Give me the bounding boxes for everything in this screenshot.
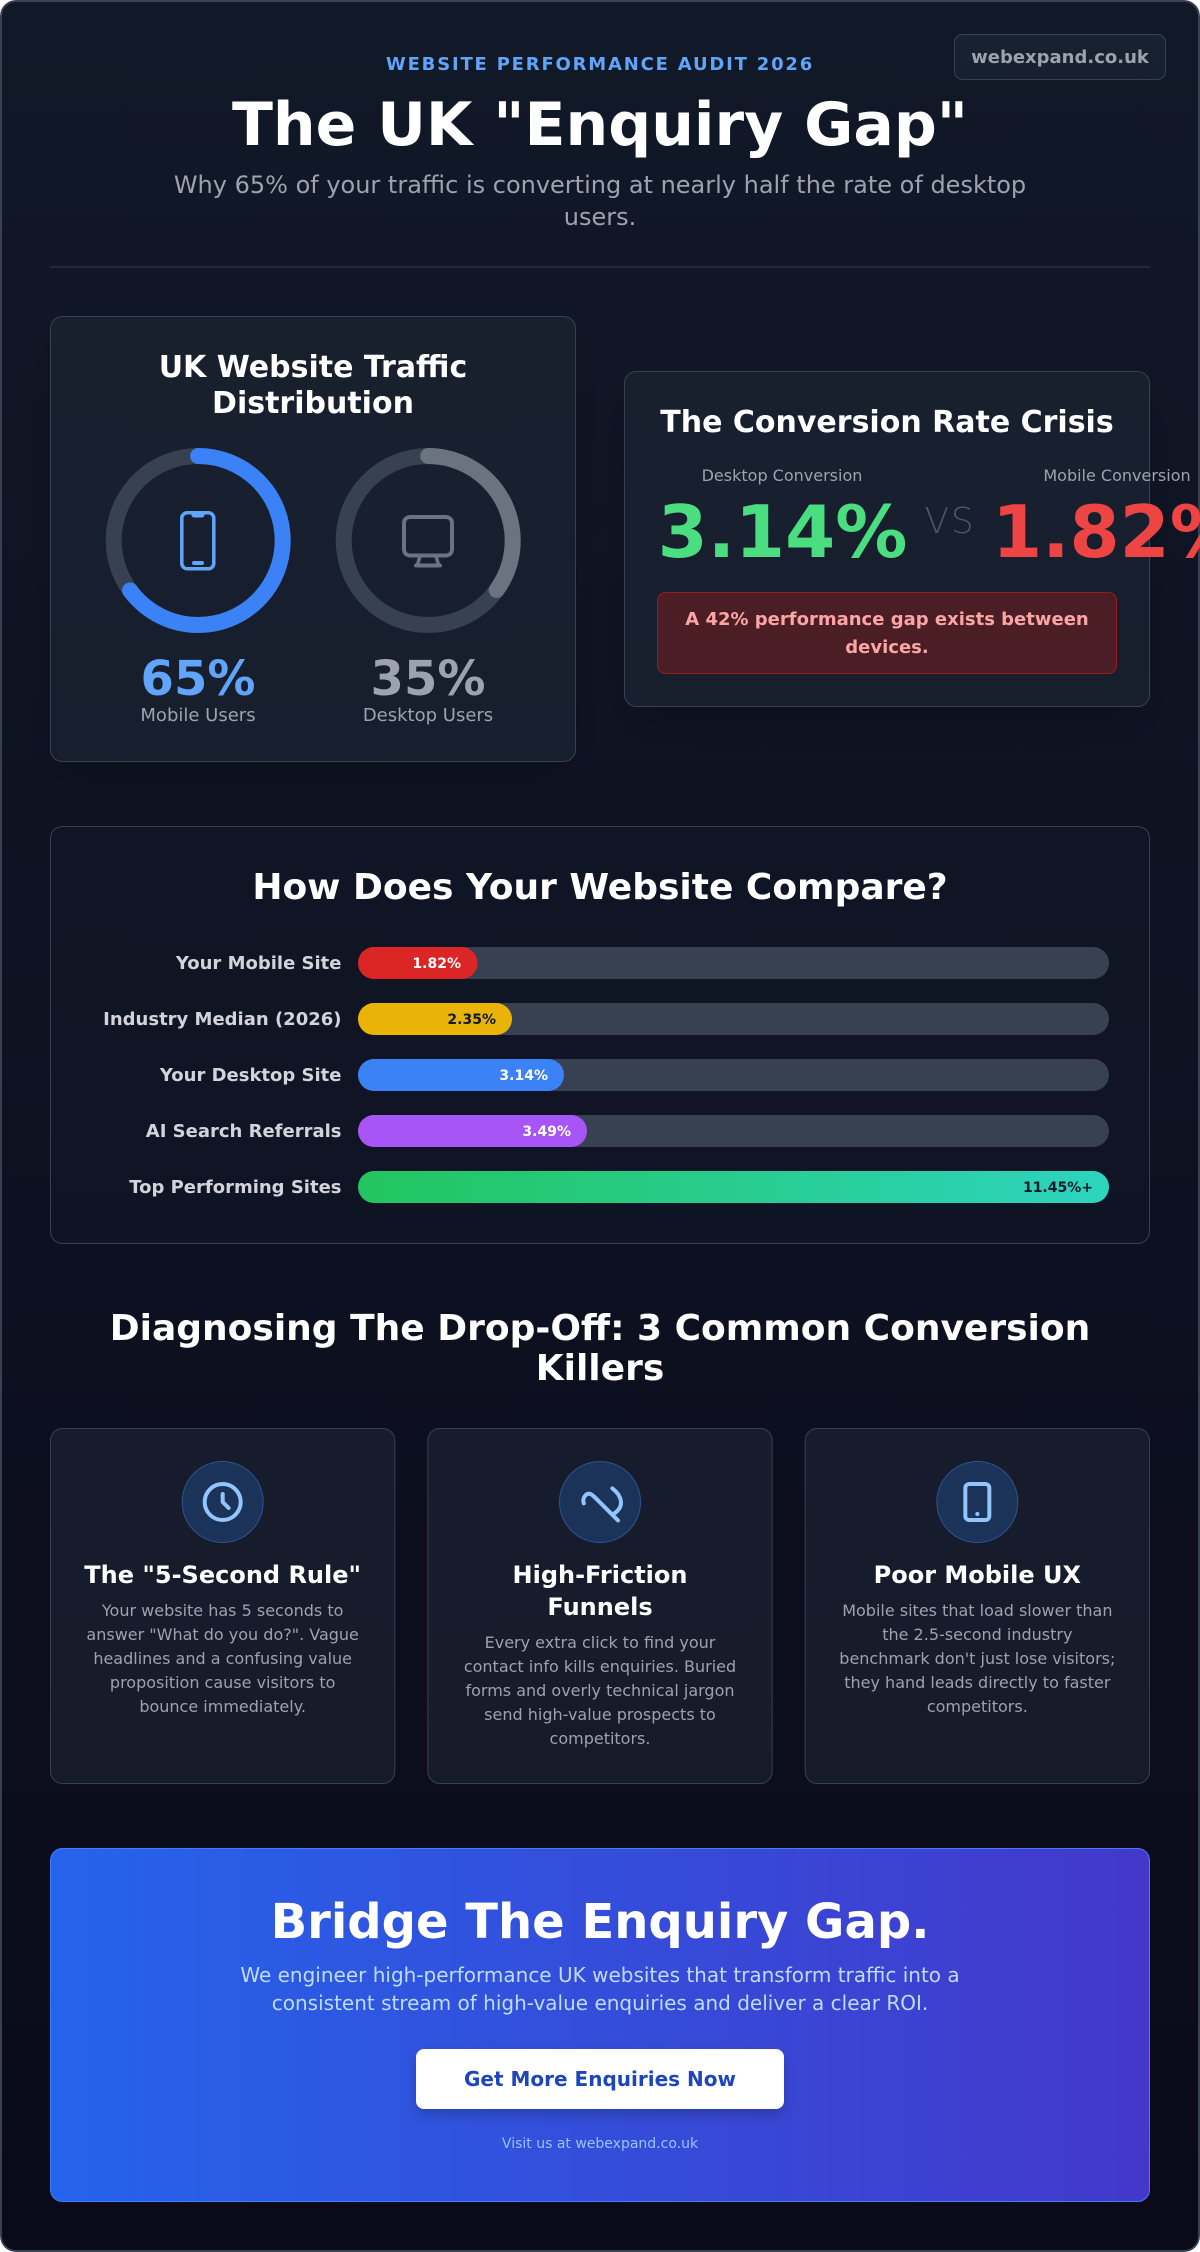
card text: benchmark don't just lose visitors; xyxy=(839,1649,1115,1668)
bar: industry median: 2.35% xyxy=(447,1012,496,1028)
desktop conversion stat: Desktop Conversion xyxy=(702,466,862,485)
eyebrow label: WEBSITE PERFORMANCE AUDIT 2026 xyxy=(386,54,814,75)
panel: website comparison bar chart xyxy=(50,826,1150,1244)
desktop percentage: 35% xyxy=(371,651,485,707)
desktop conversion stat xyxy=(662,469,906,558)
website badge: webexpand.co.uk xyxy=(971,47,1150,68)
bar: top performing sites: 11.45%+ xyxy=(1023,1180,1093,1196)
card: 5-second rule: The "5-Second Rule" xyxy=(84,1561,361,1589)
bar: top performing sites xyxy=(129,1171,1109,1203)
conversion heading: The Conversion Rate Crisis xyxy=(660,405,1114,440)
comparison heading: How Does Your Website Compare? xyxy=(252,867,948,908)
panel: conversion rate crisis xyxy=(624,372,1200,706)
cta text: consistent stream of high-value enquiries and deliver a clear ROI. xyxy=(272,1991,928,2015)
card text: the 2.5-second industry xyxy=(882,1625,1072,1644)
callout: performance gap: A 42% performance gap exists between xyxy=(685,609,1089,630)
website badge xyxy=(954,34,1166,80)
card text: answer "What do you do?". Vague xyxy=(86,1625,359,1644)
card text: Mobile sites that load slower than xyxy=(842,1601,1112,1620)
bar: ai search referrals: AI Search Referrals xyxy=(146,1121,342,1142)
card text: Your website has 5 seconds to xyxy=(101,1601,343,1620)
bar: top performing sites: Top Performing Sites xyxy=(129,1177,342,1198)
section heading: conversion killers: Killers xyxy=(536,1348,664,1389)
bar: your desktop site: Your Desktop Site xyxy=(159,1065,342,1086)
bar: your mobile site: 1.82% xyxy=(412,956,461,972)
icon: mobile phone xyxy=(182,513,214,569)
card text: send high-value prospects to xyxy=(484,1705,716,1724)
header xyxy=(174,54,1026,231)
icon: clock xyxy=(182,1462,263,1542)
card text: competitors. xyxy=(927,1697,1028,1716)
donut: desktop 35% xyxy=(344,456,513,726)
card text: forms and overly technical jargon xyxy=(466,1681,734,1700)
bar: your mobile site: Your Mobile Site xyxy=(175,953,342,974)
bar: industry median xyxy=(103,1003,1109,1035)
callout: performance gap: devices. xyxy=(845,637,929,658)
desktop conversion stat: 3.14% xyxy=(658,490,907,574)
mobile label: Mobile Users xyxy=(140,705,256,726)
subtitle: users. xyxy=(564,203,636,231)
mobile conversion stat: Mobile Conversion xyxy=(1043,466,1191,485)
cta text: We engineer high-performance UK websites that transform traffic into a xyxy=(240,1963,960,1987)
desktop label: Desktop Users xyxy=(363,705,493,726)
card: high-friction funnels: Funnels xyxy=(547,1593,653,1621)
bar: ai search referrals: 3.49% xyxy=(522,1124,571,1140)
card text: contact info kills enquiries. Buried xyxy=(464,1657,736,1676)
card text: proposition cause visitors to xyxy=(110,1673,335,1692)
call to action banner xyxy=(50,1848,1150,2202)
donut: mobile 65% xyxy=(114,456,283,726)
title: The UK "Enquiry Gap" xyxy=(232,90,968,160)
traffic heading: Distribution xyxy=(212,386,414,421)
icon: funnel curve xyxy=(560,1462,640,1542)
subtitle: Why 65% of your traffic is converting at nearly half the rate of desktop xyxy=(174,171,1026,199)
mobile conversion stat xyxy=(1000,469,1200,558)
card text: bounce immediately. xyxy=(139,1697,306,1716)
callout: performance gap xyxy=(658,592,1116,674)
card: high-friction funnels: High-Friction xyxy=(513,1561,687,1589)
card: poor mobile ux: Poor Mobile UX xyxy=(874,1561,1082,1589)
panel: traffic distribution xyxy=(50,316,576,762)
icon: desktop monitor xyxy=(404,517,452,566)
bar: ai search referrals xyxy=(146,1115,1109,1147)
card: poor mobile ux xyxy=(805,1428,1150,1784)
cta footer link: Visit us at webexpand.co.uk xyxy=(502,2136,699,2152)
section heading: conversion killers: Diagnosing The Drop-Off: 3 Common Conversion xyxy=(110,1308,1090,1349)
cta button xyxy=(416,2049,784,2109)
traffic heading: UK Website Traffic xyxy=(159,350,467,385)
card: 5-second rule xyxy=(50,1428,395,1784)
bar: your mobile site xyxy=(175,947,1109,979)
card: high-friction funnels xyxy=(428,1428,772,1784)
icon: phone xyxy=(937,1462,1018,1542)
card text: Every extra click to find your xyxy=(485,1633,716,1652)
bar: your desktop site xyxy=(159,1059,1109,1091)
versus label: VS xyxy=(924,501,976,542)
cta heading: Bridge The Enquiry Gap. xyxy=(271,1894,929,1950)
bar: industry median: Industry Median (2026) xyxy=(103,1009,342,1030)
bar: your desktop site: 3.14% xyxy=(499,1068,548,1084)
card text: headlines and a confusing value xyxy=(93,1649,352,1668)
card text: competitors. xyxy=(550,1729,650,1748)
cta button: Get More Enquiries Now xyxy=(464,2067,736,2091)
mobile percentage: 65% xyxy=(141,651,255,707)
card text: they hand leads directly to faster xyxy=(844,1673,1111,1692)
